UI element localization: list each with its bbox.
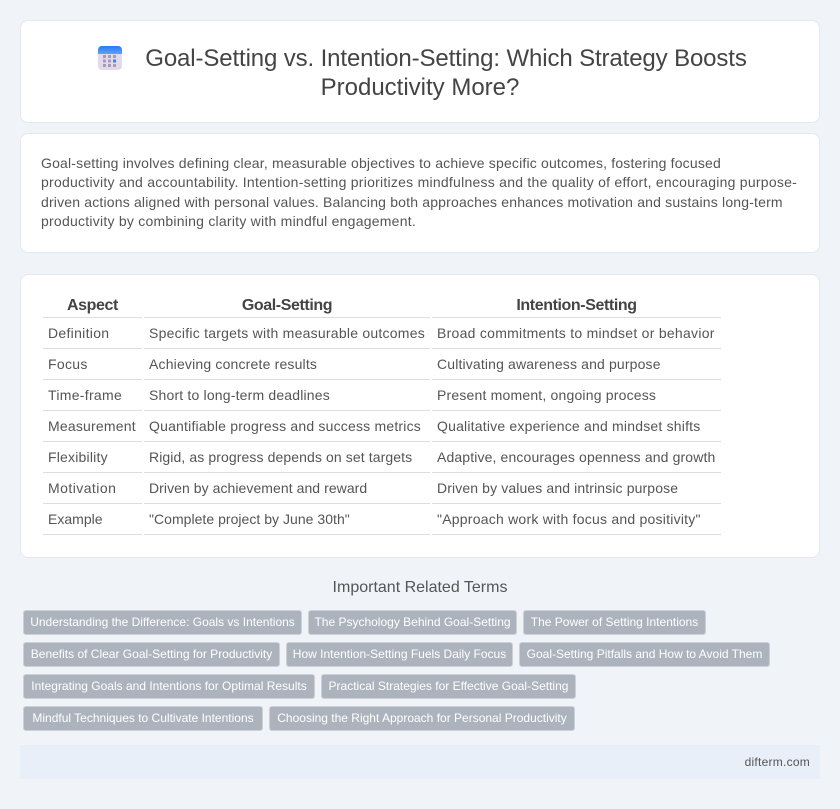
comparison table: Present moment, ongoing process xyxy=(437,387,656,403)
related term chips: How Intention-Setting Fuels Daily Focus xyxy=(293,647,506,661)
title: Goal-Setting vs. Intention-Setting: Which Strategy Boosts xyxy=(145,45,747,72)
footer bar xyxy=(20,745,820,779)
related term chips: The Power of Setting Intentions xyxy=(531,615,698,629)
comparison table: Adaptive, encourages openness and growth xyxy=(437,449,715,465)
comparison table: Short to long-term deadlines xyxy=(149,387,330,403)
comparison table: Qualitative experience and mindset shifts xyxy=(437,418,700,434)
related term chips: Integrating Goals and Intentions for Optimal Results xyxy=(31,679,307,693)
panel: header xyxy=(20,20,820,123)
comparison table: Goal-Setting xyxy=(242,297,332,314)
comparison table: Intention-Setting xyxy=(516,297,637,314)
comparison table: Aspect xyxy=(67,297,118,314)
comparison table: "Approach work with focus and positivity" xyxy=(437,511,701,527)
footer credit: difterm.com xyxy=(745,755,810,769)
text block: description: driven actions aligned with personal values. Balancing both approaches enhances motivation and sustains long-term xyxy=(41,194,783,210)
comparison table: Definition xyxy=(48,325,109,341)
text block: description: productivity and accountability. Intention-setting prioritizes mindfulness and the quality of effort, encouraging purpose- xyxy=(41,174,797,190)
comparison table: Focus xyxy=(48,356,88,372)
comparison table: Example xyxy=(48,511,103,527)
comparison table: Flexibility xyxy=(48,449,108,465)
related term chips: The Psychology Behind Goal-Setting xyxy=(314,615,511,629)
heading: related terms: Important Related Terms xyxy=(333,579,507,596)
comparison table: "Complete project by June 30th" xyxy=(149,511,350,527)
related term chips: Understanding the Difference: Goals vs Intentions xyxy=(30,615,295,629)
comparison table: Driven by achievement and reward xyxy=(149,480,367,496)
comparison table: Time-frame xyxy=(48,387,122,403)
icon: calendar xyxy=(98,46,122,70)
title: Productivity More? xyxy=(321,74,519,101)
related term chips: Goal-Setting Pitfalls and How to Avoid Them xyxy=(527,647,762,661)
related term chips: Practical Strategies for Effective Goal-Setting xyxy=(329,679,568,693)
related term chips: Choosing the Right Approach for Personal Productivity xyxy=(277,711,567,725)
title xyxy=(145,45,747,101)
panel: description xyxy=(20,133,820,253)
comparison table: Motivation xyxy=(48,480,116,496)
comparison table: Quantifiable progress and success metrics xyxy=(149,418,421,434)
related term chips xyxy=(23,610,770,731)
comparison table: Rigid, as progress depends on set targets xyxy=(149,449,412,465)
comparison table: Cultivating awareness and purpose xyxy=(437,356,661,372)
text block: description xyxy=(41,155,797,229)
related term chips: Benefits of Clear Goal-Setting for Productivity xyxy=(31,647,272,661)
text block: description: Goal-setting involves defining clear, measurable objectives to achieve specific outcomes, fostering focused xyxy=(41,155,721,171)
comparison table: Achieving concrete results xyxy=(149,356,317,372)
comparison table: Specific targets with measurable outcomes xyxy=(149,325,425,341)
comparison table: Broad commitments to mindset or behavior xyxy=(437,325,715,341)
text block: description: productivity by combining clarity with mindful engagement. xyxy=(41,213,416,229)
comparison table: Driven by values and intrinsic purpose xyxy=(437,480,678,496)
panel: comparison table xyxy=(20,274,820,558)
related term chips: Mindful Techniques to Cultivate Intentions xyxy=(32,711,254,725)
comparison table: Measurement xyxy=(48,418,136,434)
